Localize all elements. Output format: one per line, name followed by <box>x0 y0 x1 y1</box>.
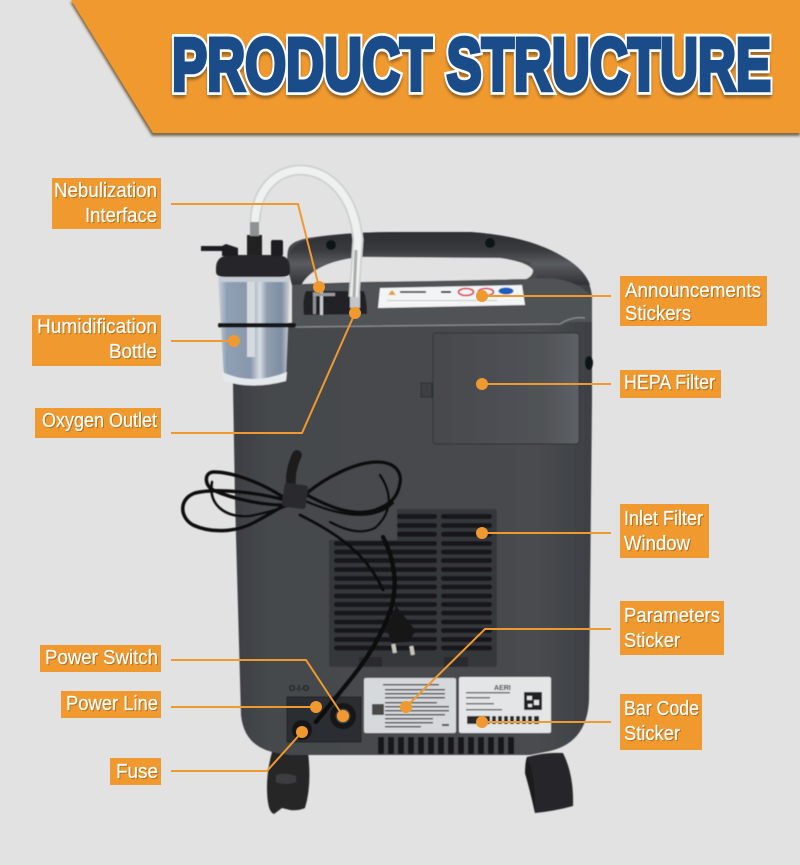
callout: Nebulization Interface: Interface <box>85 205 157 227</box>
callout: Power Line <box>61 691 322 718</box>
carry handle <box>288 232 590 285</box>
callout: HEPA Filter: HEPA Filter <box>624 372 715 394</box>
clear tube <box>255 170 358 297</box>
bottom comb vents <box>378 737 514 754</box>
inlet vent grille <box>329 509 497 667</box>
bar code sticker: AERI <box>494 685 511 692</box>
callout: Nebulization Interface: Nebulization <box>54 180 157 202</box>
left caster wheel <box>267 752 309 814</box>
callout: Announcements Stickers: Stickers <box>625 303 691 325</box>
top band <box>292 278 592 326</box>
concentrator body <box>232 232 592 755</box>
callout: Inlet Filter Window <box>476 504 709 558</box>
callout: Bar Code Sticker <box>476 694 702 750</box>
callout: Nebulization Interface <box>52 178 325 293</box>
callout: Announcements Stickers: Announcements <box>625 280 761 302</box>
callout: Parameters Sticker: Parameters <box>624 605 720 627</box>
callout: Fuse <box>110 726 308 785</box>
humidification bottle <box>201 222 296 386</box>
right caster wheel <box>525 753 573 813</box>
HEPA filter door <box>421 333 579 444</box>
outlet recess <box>303 291 367 315</box>
header banner <box>70 0 800 136</box>
power cord <box>183 455 400 722</box>
callout: Oxygen Outlet: Oxygen Outlet <box>42 410 157 432</box>
callout: Bar Code Sticker: Sticker <box>624 723 680 745</box>
callout: Humidification Bottle <box>32 315 240 366</box>
callout: Humidification Bottle: Humidification <box>37 316 157 338</box>
callout: Inlet Filter Window: Window <box>624 533 691 555</box>
handle opening <box>302 257 533 284</box>
callout: Power Switch <box>40 645 349 722</box>
oxygen concentrator product <box>183 170 593 814</box>
warning sticker <box>378 285 525 308</box>
callout: Announcements Stickers <box>476 276 767 326</box>
callout: Bar Code Sticker: Bar Code <box>624 698 699 720</box>
power panel: O-I-O <box>289 684 309 693</box>
callout: Power Switch: Power Switch <box>45 647 158 669</box>
callout: Parameters Sticker <box>400 601 724 713</box>
callout: Inlet Filter Window: Inlet Filter <box>624 508 703 530</box>
callout: HEPA Filter <box>476 370 721 398</box>
bar code sticker <box>459 677 551 733</box>
callout: Humidification Bottle: Bottle <box>109 341 157 363</box>
parameters sticker <box>364 678 456 733</box>
power plug <box>386 606 416 655</box>
callout: Parameters Sticker: Sticker <box>624 630 680 652</box>
callout: Oxygen Outlet <box>35 307 361 438</box>
handle holes <box>326 238 593 370</box>
power panel <box>287 684 361 742</box>
callout: Fuse: Fuse <box>116 761 158 783</box>
callout: Power Line: Power Line <box>66 693 158 715</box>
